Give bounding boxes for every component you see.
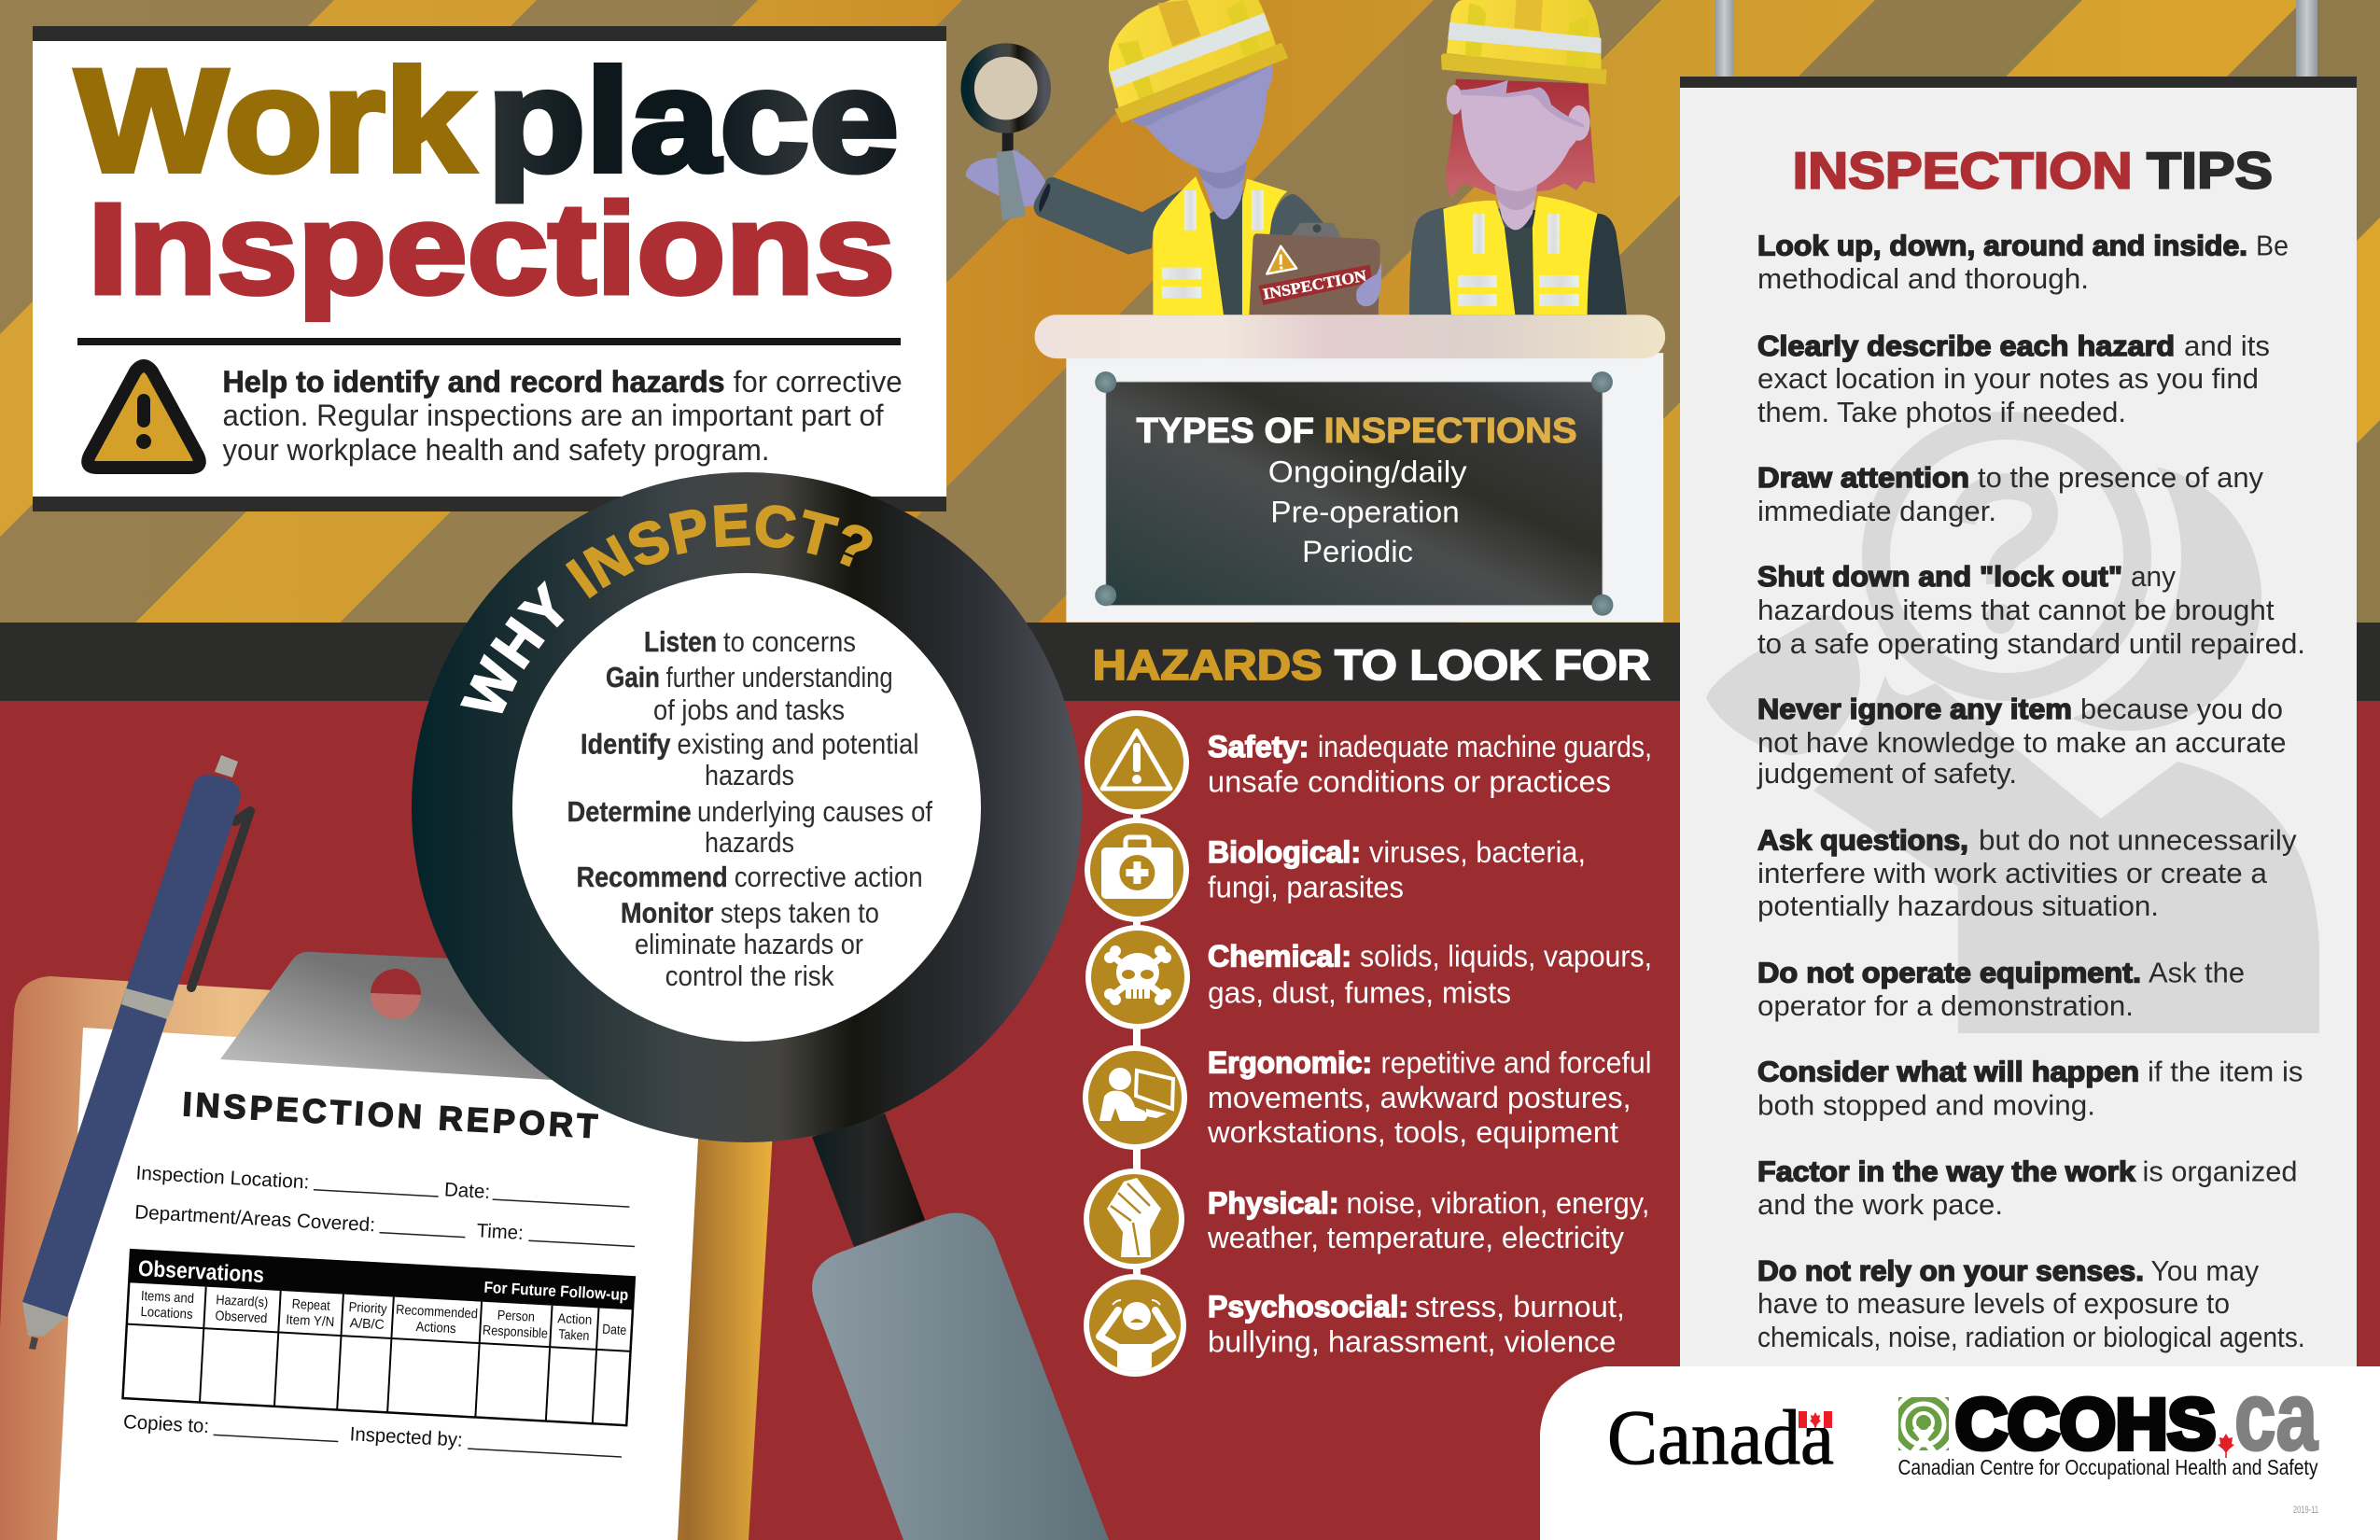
table: observations: Responsible [483,1323,548,1342]
report form: INSPECTION REPORT [182,1085,598,1145]
heading: Workplace Inspections [76,40,899,321]
heading: Workplace Inspections: Work [76,40,474,203]
text: tips list: Do not operate equipment. [1757,957,2141,989]
text: reasons to inspect: corrective action [735,861,923,893]
hazard: safety [1085,710,1652,815]
table: observations: Actions [415,1320,456,1337]
text: tips list: operator for a demonstration. [1757,989,2134,1022]
figure: male inspector [966,0,1381,315]
text: tips list: and the work pace. [1757,1188,2003,1221]
text: reasons to inspect: Recommend [577,861,728,893]
text: tips list: Factor in the way the work [1757,1155,2136,1188]
watermark: person with magnifier [1706,382,2319,1033]
text: tips list: judgement of safety. [1757,757,2017,790]
text: reasons to inspect: Determine [567,795,692,828]
text: tips list: exact location in your notes as you find [1757,362,2259,395]
report form: Copies to: [123,1411,210,1437]
logo: Canada wordmark: Canada [1607,1394,1834,1481]
text: reasons to inspect: Gain [606,661,660,693]
text: reasons to inspect: existing and potential [678,728,918,760]
text: tips list: both stopped and moving. [1757,1089,2095,1122]
text: reasons to inspect: of jobs and tasks [653,693,845,726]
table: observations: Items and [141,1289,194,1307]
panel: hazards list [1083,710,1652,1377]
text: tips list: them. Take photos if needed. [1757,396,2126,428]
hazard: ergonomic: repetitive and forceful [1381,1046,1652,1080]
text: tips list: and its [2184,329,2270,362]
text: tips list: any [2131,560,2176,593]
text: tips list: hazardous items that cannot be brought [1757,594,2275,626]
plaque: types of inspections: TYPES OF [1137,412,1314,451]
heading: hazards to look for [1093,641,1650,689]
paper sheet [57,1028,702,1540]
text: reasons to inspect: Monitor [621,897,713,930]
background: hazard stripes [0,0,2380,623]
table: observations [123,1250,635,1425]
plaque: types of inspections: Pre-operation [1270,495,1460,529]
text: tips list: Look up, down, around and inside. [1757,230,2247,262]
text: introduction: your workplace health and safety program. [222,433,769,467]
icon: warning triangle [88,366,200,468]
hazard: ergonomic: Ergonomic: [1208,1046,1372,1080]
illustration: clipboard with inspection report [0,952,779,1540]
clipboard with inspection label [1249,223,1381,315]
heading: inspection tips: TIPS [2147,142,2273,200]
logo: CCOHS.ca: ca [2234,1363,2318,1471]
report form: Time: [476,1220,524,1244]
icon: raised fist [1107,1178,1161,1257]
table: observations: Person [497,1309,535,1325]
table: observations: Observed [215,1309,268,1326]
text: reasons to inspect: steps taken to [721,897,879,930]
hazard: ergonomic [1083,1045,1652,1150]
table: observations: For Future Follow-up [483,1279,629,1304]
icon: first aid kit [1101,837,1173,899]
hazard: safety: Safety: [1208,730,1309,763]
text: tips list: Shut down and "lock out" [1757,560,2122,593]
report form: Inspected by: [349,1423,463,1451]
text: tips list: immediate danger. [1757,495,1996,527]
hazard: psychosocial [1084,1274,1625,1377]
illustration: workers and podium [966,0,1665,623]
hazard: psychosocial: stress, burnout, [1415,1290,1625,1323]
hazard: safety: unsafe conditions or practices [1208,765,1611,799]
report form [121,1083,644,1460]
hazard: chemical: Chemical: [1208,940,1351,973]
text: introduction [222,365,903,467]
text: tips list: methodical and thorough. [1757,262,2089,295]
text: tips list: potentially hazardous situation. [1757,889,2159,922]
panel: podium [1035,315,1665,623]
hazard: psychosocial: Psychosocial: [1208,1290,1408,1323]
plaque: types of inspections: Ongoing/daily [1268,454,1467,488]
hazard: biological: Biological: [1208,835,1361,869]
table: observations: Item Y/N [286,1312,335,1330]
logo: CCOHS.ca: CCOHS [1955,1385,2216,1464]
icon: distressed person [1099,1300,1172,1372]
text: tips list: Clearly describe each hazard [1757,329,2175,362]
heading: why inspect: WHY INSPECT? [460,504,873,713]
text: tips list: to a safe operating standard until repaired. [1757,627,2305,660]
text: tips list: if the item is [2148,1055,2303,1088]
panel: why inspect magnifier lens [412,472,1082,1142]
text: reasons to inspect: Listen [644,625,717,658]
hazard: chemical: gas, dust, fumes, mists [1208,976,1511,1010]
text: tips list: Ask the [2149,957,2245,989]
icon: hard hat [1109,0,1288,123]
plaque: types of inspections: Periodic [1302,534,1413,568]
hazard: biological: fungi, parasites [1208,870,1404,903]
text: tips list: You may [2150,1254,2260,1287]
text: tips list: to the presence of any [1978,461,2263,494]
logo: CCOHS.ca [1898,1396,2319,1479]
hazard: ergonomic: workstations, tools, equipment [1207,1115,1618,1149]
heading: inspection tips [1793,142,2273,200]
panel: footer logos [1540,1363,2380,1540]
table: observations: Priority [348,1300,388,1317]
table: observations: Hazard(s) [216,1293,269,1310]
text: reasons to inspect: hazards [705,759,794,791]
background: dark band [0,623,2380,702]
icon: hard hat [1441,0,1606,85]
text: tips list: chemicals, noise, radiation or biological agents. [1757,1321,2305,1353]
hazard: safety: inadequate machine guards, [1318,730,1652,763]
hazard: physical: weather, temperature, electricity [1207,1221,1624,1254]
heading: hazards to look for: TO LOOK FOR [1335,641,1650,689]
hazard: physical: noise, vibration, energy, [1346,1186,1650,1220]
text: tips list: Do not rely on your senses. [1757,1254,2144,1287]
text: date code: 2019-11 [2293,1505,2318,1516]
text: reasons to inspect [567,625,932,992]
heading: hazards to look for: HAZARDS [1093,641,1323,689]
figure: female inspector [1409,0,1627,315]
report form: Inspection Location: [135,1162,310,1193]
text: tips list: have to measure levels of exposure to [1757,1287,2230,1320]
clipboard with inspection label: INSPECTION [1262,267,1368,303]
icon: warning [1102,731,1170,789]
hazard: chemical [1085,925,1652,1029]
metal clip [220,952,597,1083]
hazard: physical [1084,1169,1650,1269]
icon: large magnifying glass handle [812,1113,1109,1540]
text: tips list: is organized [2143,1155,2298,1188]
text: reasons to inspect: control the risk [665,959,834,992]
heading: Workplace Inspections: place [487,40,899,203]
table: observations: Action [557,1311,593,1328]
table: observations: Observations [137,1256,265,1288]
text: reasons to inspect: hazards [705,826,794,859]
text: tips list: not have knowledge to make an accurate [1757,726,2287,759]
heading: Workplace Inspections: Inspections [88,177,895,321]
panel: inspection tips [1680,0,2357,1367]
hazard: chemical: solids, liquids, vapours, [1360,940,1652,973]
clipboard board [0,976,779,1540]
text: tips list: interfere with work activities or create a [1757,857,2268,889]
table: observations: Taken [558,1327,590,1344]
text: tips list: Be [2256,230,2289,262]
text: tips list: but do not unnecessarily [1979,824,2297,857]
text: tips list: Ask questions, [1757,824,1968,857]
table: observations: Locations [140,1305,193,1323]
text: reasons to inspect: to concerns [723,625,856,658]
plaque: types of inspections [1095,371,1613,616]
icon: skull and crossbones [1104,945,1171,1005]
table: observations: Date [602,1323,627,1338]
icon: pen [22,755,250,1350]
text: tips list: because you do [2080,693,2283,725]
text: reasons to inspect: eliminate hazards or [635,928,863,960]
text: tips list: Consider what will happen [1757,1055,2139,1088]
plaque: types of inspections: INSPECTIONS [1323,412,1577,451]
icon: hand-held magnifier [966,50,1053,220]
report form: Department/Areas Covered: [134,1201,376,1236]
heading: inspection tips: INSPECTION [1793,142,2133,200]
text: introduction: action. Regular inspections are an important part of [222,399,884,432]
report form: Date: [443,1179,491,1203]
text: reasons to inspect: further understanding [666,661,893,693]
table: observations: Recommended [396,1303,478,1322]
hazard: ergonomic: movements, awkward postures, [1208,1081,1631,1114]
hazard: biological: viruses, bacteria, [1369,835,1586,869]
hazard: physical: Physical: [1208,1186,1339,1220]
icon: person at computer [1099,1068,1173,1121]
text: tips list: Draw attention [1757,461,1969,494]
text: tips list [1757,230,2305,1353]
background: red field [0,701,2380,1540]
hazard: psychosocial: bullying, harassment, violence [1208,1325,1617,1359]
text: introduction: for corrective [734,365,903,399]
text: tips list: Never ignore any item [1757,693,2072,725]
text: reasons to inspect: Identify [581,728,671,760]
table: observations: Repeat [291,1297,330,1314]
table: observations: A/B/C [349,1316,385,1333]
text: reasons to inspect: underlying causes of [697,795,932,828]
hazard: biological [1085,818,1586,922]
panel: title [33,26,946,511]
text: introduction: Help to identify and record hazards [222,365,724,399]
